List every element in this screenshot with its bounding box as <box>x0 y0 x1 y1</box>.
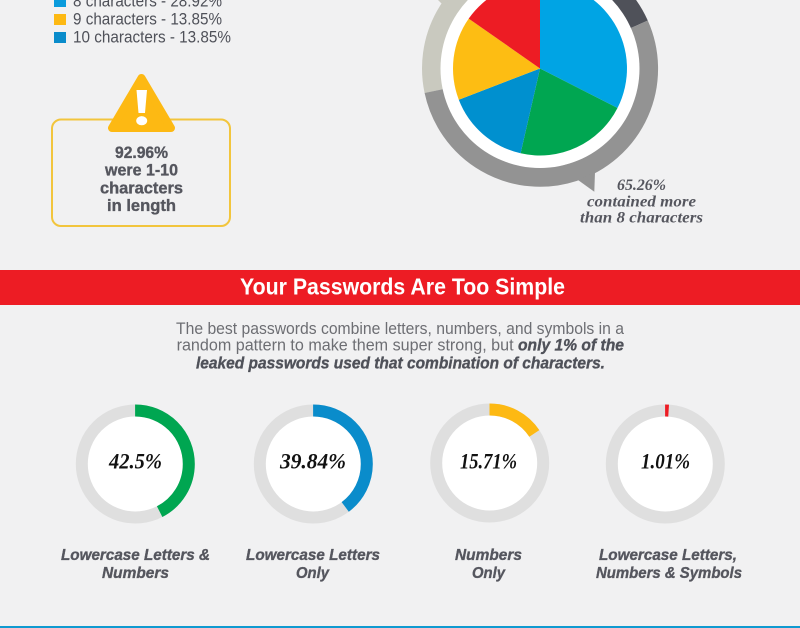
label: numbers only: Numbers <box>455 547 522 564</box>
pie caption: 65.26% <box>617 177 666 194</box>
label: lowercase letters and numbers: Numbers <box>102 565 169 582</box>
label: lowercase letters only: Only <box>296 565 330 582</box>
callout: 92.96 percent warning: in length <box>107 197 176 215</box>
label: lowercase letters and numbers <box>61 547 210 582</box>
callout: 92.96 percent warning <box>52 78 230 226</box>
callout: 92.96 percent warning: were 1-10 <box>104 162 178 180</box>
donut: lowercase letters, numbers and symbols: 1.01% <box>641 448 690 474</box>
donut: lowercase letters, numbers and symbols <box>612 410 719 518</box>
icon: warning triangle <box>112 78 171 128</box>
legend: password lengths: 10 characters - 13.85% <box>73 28 231 46</box>
label: lowercase letters only: Lowercase Letters <box>246 547 380 564</box>
intro text block <box>176 319 624 373</box>
heading banner <box>0 270 800 305</box>
pie caption: contained more <box>587 194 696 211</box>
intro text block: random pattern to make them super strong, but <box>177 336 514 355</box>
label: lowercase letters and numbers: Lowercase Letters & <box>61 547 210 564</box>
intro text block: The best passwords combine letters, numbers, and symbols in a <box>176 319 624 338</box>
donut: numbers only: 15.71% <box>460 448 517 474</box>
label: numbers only <box>455 547 522 582</box>
outer ring segments <box>432 0 649 177</box>
callout: 92.96 percent warning: characters <box>100 180 183 198</box>
donut: numbers only <box>436 410 543 516</box>
label: lowercase letters, numbers and symbols: Numbers & Symbols <box>596 565 742 582</box>
donut: lowercase letters only <box>260 410 367 518</box>
pie chart with outer ring <box>432 0 649 192</box>
intro text block: leaked passwords used that combination of characters. <box>196 354 605 373</box>
pie caption <box>580 177 703 227</box>
pie slices <box>453 0 627 155</box>
donut: lowercase letters and numbers: 42.5% <box>108 448 162 474</box>
legend: password lengths <box>54 0 231 46</box>
label: lowercase letters only <box>246 547 380 582</box>
callout: 92.96 percent warning: 92.96% <box>115 144 168 162</box>
label: lowercase letters, numbers and symbols: Lowercase Letters, <box>599 547 737 564</box>
intro text block: only 1% of the <box>518 336 624 355</box>
label: numbers only: Only <box>472 565 506 582</box>
donut: lowercase letters only: 39.84% <box>279 448 346 474</box>
heading banner: Your Passwords Are Too Simple <box>240 274 565 300</box>
legend: password lengths: 9 characters - 13.85% <box>73 10 222 28</box>
label: lowercase letters, numbers and symbols <box>596 547 742 582</box>
donut: lowercase letters and numbers <box>82 410 189 518</box>
pie caption: than 8 characters <box>580 210 703 227</box>
